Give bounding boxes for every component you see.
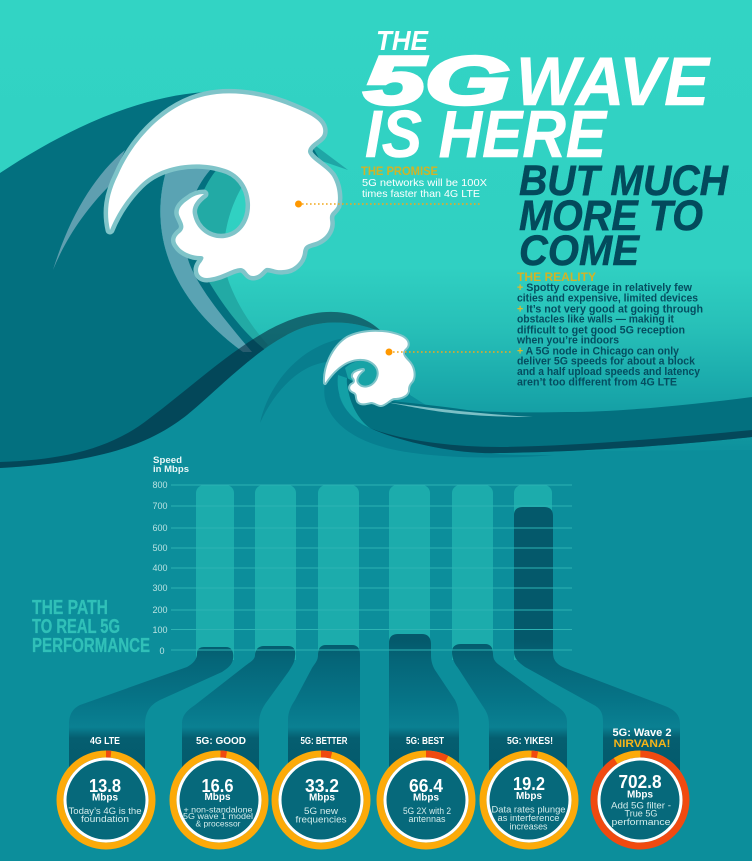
callout: the reality: aren’t too different from 4G LTE (517, 377, 677, 389)
card: 5G better (275, 735, 367, 846)
heading: but much more to come: BUT MUCH (519, 157, 729, 205)
card: 5G wave 2 nirvana: 702.8 (618, 771, 662, 792)
title: the 5G wave is here: 5G (364, 43, 510, 119)
section heading: the path to real 5G performance (32, 597, 150, 657)
card: 5G best: Mbps (413, 792, 439, 804)
small wave foam (325, 332, 414, 405)
ribbon: 5G Wave 2 (514, 507, 680, 770)
card: 4G LTE: foundation (81, 814, 129, 824)
card: 4G LTE: Mbps (92, 792, 118, 804)
card: 5G better: Mbps (309, 792, 335, 804)
callout: the promise: times faster than 4G LTE (362, 188, 480, 200)
callout: the reality (516, 270, 703, 389)
heading: but much more to come (519, 157, 729, 275)
chart axis labels: 600 (152, 523, 168, 533)
card: 4G LTE: Today’s 4G is the (68, 806, 142, 816)
callout: the promise: THE PROMISE (361, 164, 438, 178)
card: 5G yikes: 5G: YIKES! (507, 735, 553, 747)
section heading: the path to real 5G performance: THE PATH (32, 597, 108, 619)
chart axis title (153, 455, 189, 474)
promise pointer (295, 200, 480, 208)
chart axis labels: 800 (152, 480, 168, 490)
callout: the reality: cities and expensive, limited devices (517, 293, 698, 305)
card: 4G LTE: 13.8 (89, 775, 121, 796)
chart axis labels: 0 (159, 646, 165, 656)
chart axis labels: 400 (152, 563, 168, 573)
callout: the reality: + It’s not very good at going through (517, 303, 703, 315)
callout: the reality: when you’re indoors (516, 335, 619, 347)
card: 5G best: 5G: BEST (406, 735, 444, 747)
card: 4G LTE: 4G LTE (90, 735, 120, 747)
callout: the reality: + A 5G node in Chicago can only (517, 345, 680, 357)
card: 5G best: 66.4 (409, 775, 444, 796)
card: 5G better: 33.2 (305, 775, 339, 796)
card: 5G yikes: 19.2 (513, 773, 545, 794)
callout: the promise (361, 164, 487, 200)
card: 5G good: 5G wave 1 model (183, 811, 253, 821)
card: 5G wave 2 nirvana: Mbps (627, 790, 653, 800)
title: the 5G wave is here: THE (376, 25, 429, 56)
card: 5G better: 5G: BETTER (300, 735, 348, 747)
callout: the reality: + Spotty coverage in relatively few (517, 282, 692, 294)
chart axis labels: 200 (152, 605, 168, 615)
card: 5G wave 2 nirvana: Add 5G filter - (611, 800, 671, 810)
chart axis labels (152, 480, 168, 656)
ribbon: 4G LTE (69, 647, 233, 770)
card: 5G best: 5G 2X with 2 (403, 806, 451, 816)
card: 5G yikes (483, 735, 575, 846)
callout: the reality: deliver 5G speeds for about a block (517, 356, 696, 368)
title: the 5G wave is here: WAVE (516, 43, 711, 120)
card: 5G wave 2 nirvana: True 5G (624, 809, 658, 819)
section heading: the path to real 5G performance: TO REAL 5G (32, 616, 120, 638)
ribbon: 5G GOOD (182, 646, 295, 770)
card: 5G yikes: increases (510, 821, 548, 831)
card: 5G better: frequencies (296, 814, 347, 824)
card: 5G best (380, 735, 472, 846)
chart grid lines (171, 485, 572, 650)
reality pointer (386, 348, 513, 356)
chart axis title: in Mbps (153, 464, 189, 474)
card: 5G good (173, 735, 265, 846)
callout: the reality: difficult to get good 5G reception (517, 324, 685, 336)
card: 5G wave 2 nirvana (577, 727, 703, 861)
chart axis labels: 700 (152, 501, 168, 511)
chart axis labels: 100 (152, 625, 168, 635)
card: 5G yikes: Data rates plunge (492, 805, 566, 815)
card: 4G LTE (60, 735, 152, 846)
chart tracks (196, 485, 552, 660)
card: 5G wave 2 nirvana: NIRVANA! (614, 738, 670, 750)
card: 5G good: 5G: GOOD (196, 735, 246, 747)
card: 5G good: 16.6 (202, 775, 234, 796)
small wave (0, 312, 752, 861)
title: the 5G wave is here: IS HERE (365, 97, 608, 172)
card: 5G wave 2 nirvana: performance (612, 817, 670, 827)
callout: the reality: and a half upload speeds and latency (517, 366, 701, 378)
card: 5G better: 5G new (304, 806, 339, 816)
card: 5G good: + non-standalone (184, 804, 253, 814)
ribbon: 5G BETTER (288, 645, 360, 770)
heading: but much more to come: MORE TO (519, 192, 703, 240)
card: 5G best: antennas (408, 814, 446, 824)
card: 5G yikes: as interference (498, 813, 560, 823)
callout: the promise: 5G networks will be 100X (362, 177, 487, 189)
card: 5G yikes: Mbps (516, 791, 542, 802)
chart axis labels: 300 (152, 583, 168, 593)
callout: the reality: THE REALITY (517, 270, 596, 284)
bar chart (152, 455, 552, 660)
callout: the reality: obstacles like walls — making it (517, 314, 674, 326)
title: the 5G wave is here (364, 25, 711, 172)
ribbon: 5G BEST (389, 634, 459, 770)
card: 5G good: & processor (196, 818, 241, 828)
ribbon: 5G YIKES (452, 644, 567, 770)
card: 5G good: Mbps (204, 792, 231, 803)
chart axis labels: 500 (152, 543, 168, 553)
big wave (0, 92, 348, 475)
heading: but much more to come: COME (519, 227, 640, 275)
big wave foam (108, 93, 338, 278)
card: 5G wave 2 nirvana: 5G: Wave 2 (612, 727, 672, 739)
chart axis title: Speed (153, 455, 182, 465)
section heading: the path to real 5G performance: PERFORMANCE (32, 635, 150, 657)
